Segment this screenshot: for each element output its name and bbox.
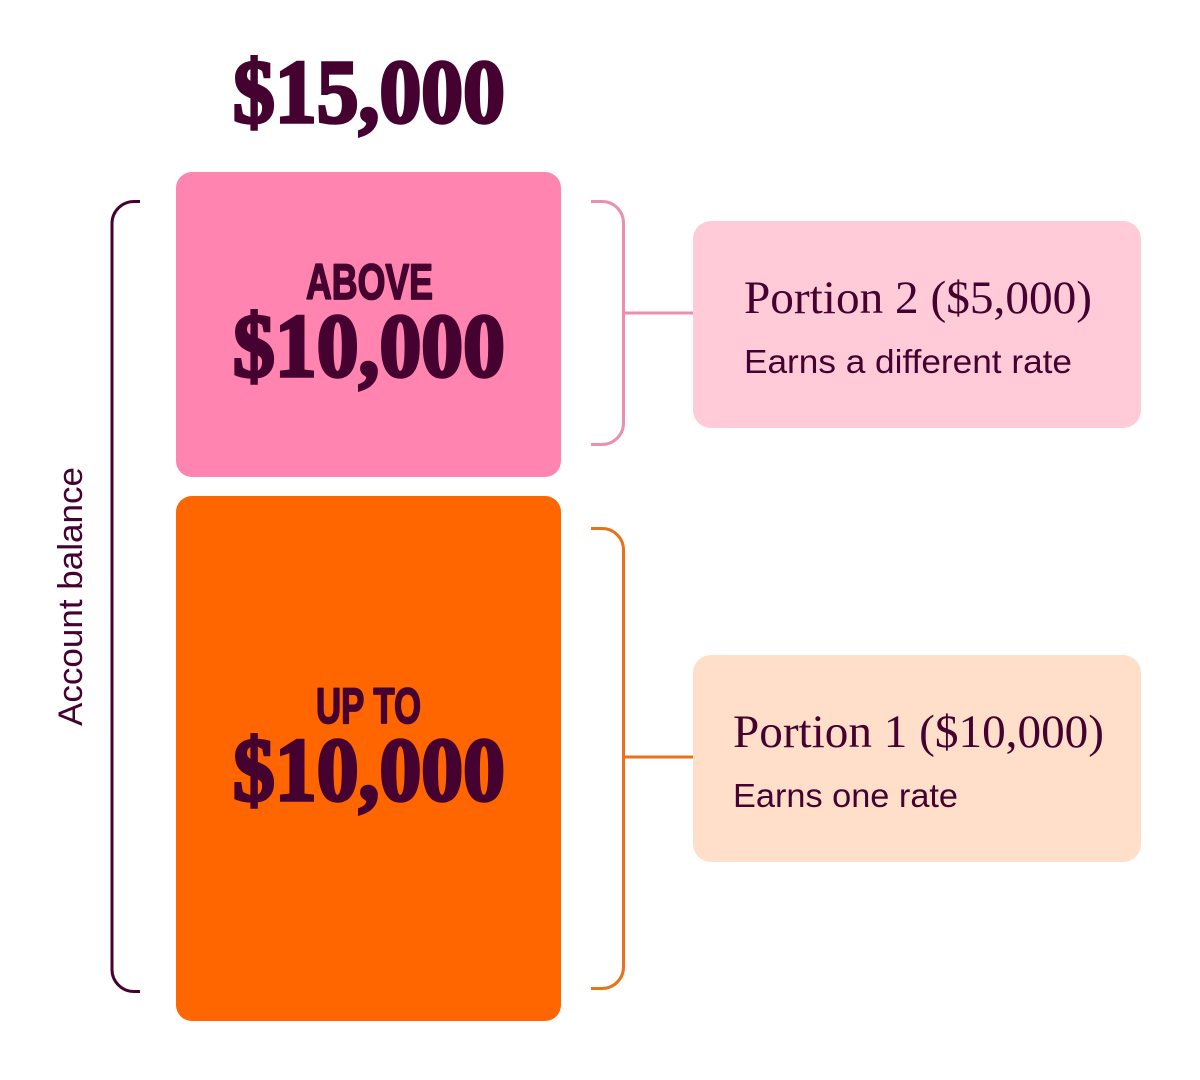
callout: portion 1 [693, 655, 1141, 862]
panel background: pink [176, 172, 561, 477]
bracket: account balance [112, 202, 140, 992]
callout background [693, 221, 1141, 428]
callout heading: Portion 1 ($10,000) [733, 706, 1104, 758]
label: above: ABOVE [306, 254, 433, 310]
connector: orange bracket [591, 528, 693, 988]
callout text: Earns one rate [733, 777, 958, 814]
panel background: orange [176, 496, 561, 1021]
connector: pink bracket [591, 202, 693, 444]
callout text: Earns a different rate [744, 343, 1072, 380]
panel: above $10,000 [176, 172, 561, 477]
axis label: account balance: Account balance [52, 467, 90, 726]
panel: up to $10,000 [176, 496, 561, 1021]
title: total balance: $15,000 [233, 43, 505, 142]
callout heading: Portion 2 ($5,000) [744, 272, 1092, 324]
callout background [693, 655, 1141, 862]
label: up to: UP TO [316, 678, 421, 734]
callout: portion 2 [693, 221, 1141, 428]
amount: $10,000: $10,000 [233, 297, 505, 396]
amount: $10,000: $10,000 [233, 721, 505, 820]
